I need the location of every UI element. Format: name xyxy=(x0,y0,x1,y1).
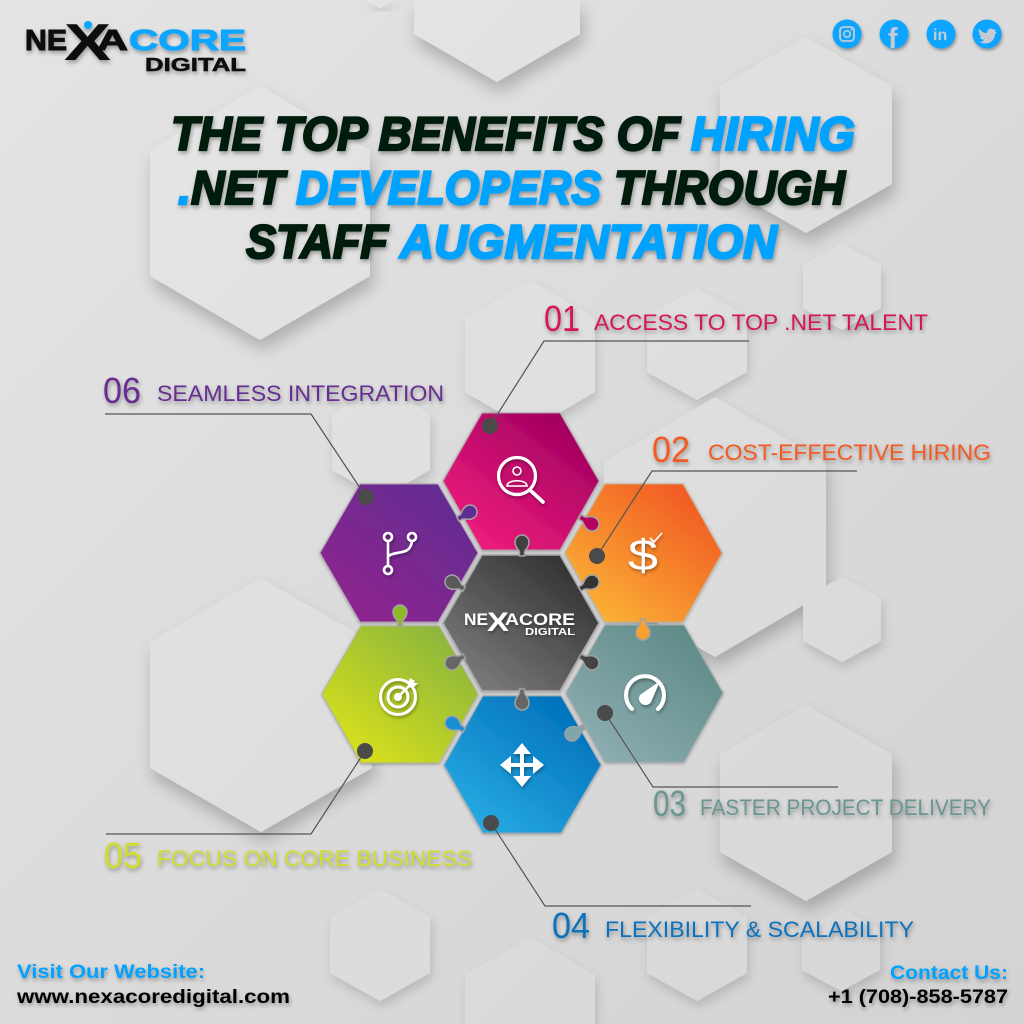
footer: contact xyxy=(828,963,1008,1008)
icon: dollar check: $ xyxy=(628,531,658,580)
title: STAFF xyxy=(246,215,389,268)
icon: search person xyxy=(498,458,543,502)
icon: facebook: f xyxy=(888,23,898,55)
hexagon 06: purple xyxy=(320,484,478,622)
logo: Nexacore Digital xyxy=(25,14,246,75)
hexagon puzzle diagram xyxy=(320,413,723,833)
label 01: access to top .net talent: ACCESS TO TOP .NET TALENT xyxy=(594,310,928,335)
label 01: access to top .net talent xyxy=(482,298,928,434)
hexagon 05: green xyxy=(322,626,478,763)
icon: speedometer xyxy=(626,676,664,709)
center logo: A xyxy=(505,610,519,629)
title: THE TOP BENEFITS OF xyxy=(171,107,681,160)
center logo: X xyxy=(487,607,509,637)
background hexagon pattern xyxy=(150,0,892,1024)
label 02: cost-effective hiring: COST-EFFECTIVE HIRING xyxy=(708,440,991,465)
title: . xyxy=(178,161,191,214)
label 06: seamless integration: SEAMLESS INTEGRATION xyxy=(157,381,444,406)
title xyxy=(171,107,855,268)
label 02: cost-effective hiring: 02 xyxy=(652,429,690,470)
label 04: flexibility and scalability: 04 xyxy=(552,905,590,946)
icon: branching path xyxy=(384,533,416,574)
label 06: seamless integration: 06 xyxy=(103,370,141,411)
label 05: focus on core business: 05 xyxy=(104,835,142,876)
logo: Nexacore Digital: CORE xyxy=(129,25,246,57)
label 01: access to top .net talent: 01 xyxy=(544,298,580,339)
center logo: NE xyxy=(464,610,488,629)
label 06: seamless integration xyxy=(103,370,444,505)
label 02: cost-effective hiring xyxy=(589,429,991,564)
hexagon 03: teal xyxy=(566,625,723,762)
logo: Nexacore Digital: X xyxy=(64,14,111,72)
icon: instagram xyxy=(832,20,862,48)
footer: website xyxy=(16,962,290,1008)
title: DEVELOPERS xyxy=(296,161,601,214)
label 05: focus on core business xyxy=(104,743,472,876)
social media icons xyxy=(832,20,1002,55)
label 05: focus on core business: FOCUS ON CORE BUSINESS xyxy=(157,846,472,871)
center logo: CORE xyxy=(519,610,575,629)
label 03: faster project delivery xyxy=(597,705,991,824)
logo: Nexacore Digital: DIGITAL xyxy=(145,55,246,75)
hexagon 02: orange xyxy=(565,484,722,622)
icon: four-way arrows xyxy=(500,743,544,787)
icon: twitter xyxy=(972,20,1002,48)
footer: website: www.nexacoredigital.com xyxy=(16,987,290,1008)
footer: contact: +1 (708)-858-5787 xyxy=(828,987,1008,1008)
label 03: faster project delivery: FASTER PROJECT DELIVERY xyxy=(700,795,991,820)
footer: website: Visit Our Website: xyxy=(17,962,205,983)
label 03: faster project delivery: 03 xyxy=(653,783,686,824)
hexagon 01: pink xyxy=(443,413,599,550)
title: AUGMENTATION xyxy=(399,215,778,268)
title: NET xyxy=(191,161,288,214)
hexagon center: dark xyxy=(443,555,599,691)
hexagon 04: blue xyxy=(444,696,601,833)
puzzle connector tabs xyxy=(393,502,650,744)
icon: facebook xyxy=(880,20,908,55)
icon: linkedin xyxy=(926,20,956,48)
center logo: DIGITAL xyxy=(525,627,575,638)
title: THROUGH xyxy=(614,161,846,214)
center logo xyxy=(464,607,575,638)
logo: Nexacore Digital: A xyxy=(97,25,128,57)
title: HIRING xyxy=(691,107,855,160)
label 04: flexibility and scalability xyxy=(483,815,914,946)
label 04: flexibility and scalability: FLEXIBILITY & SCALABILITY xyxy=(605,917,914,942)
logo: Nexacore Digital: NE xyxy=(25,25,67,57)
footer: contact: Contact Us: xyxy=(890,963,1008,984)
icon: target with arrow xyxy=(380,678,418,714)
icon: linkedin: in xyxy=(933,27,947,44)
